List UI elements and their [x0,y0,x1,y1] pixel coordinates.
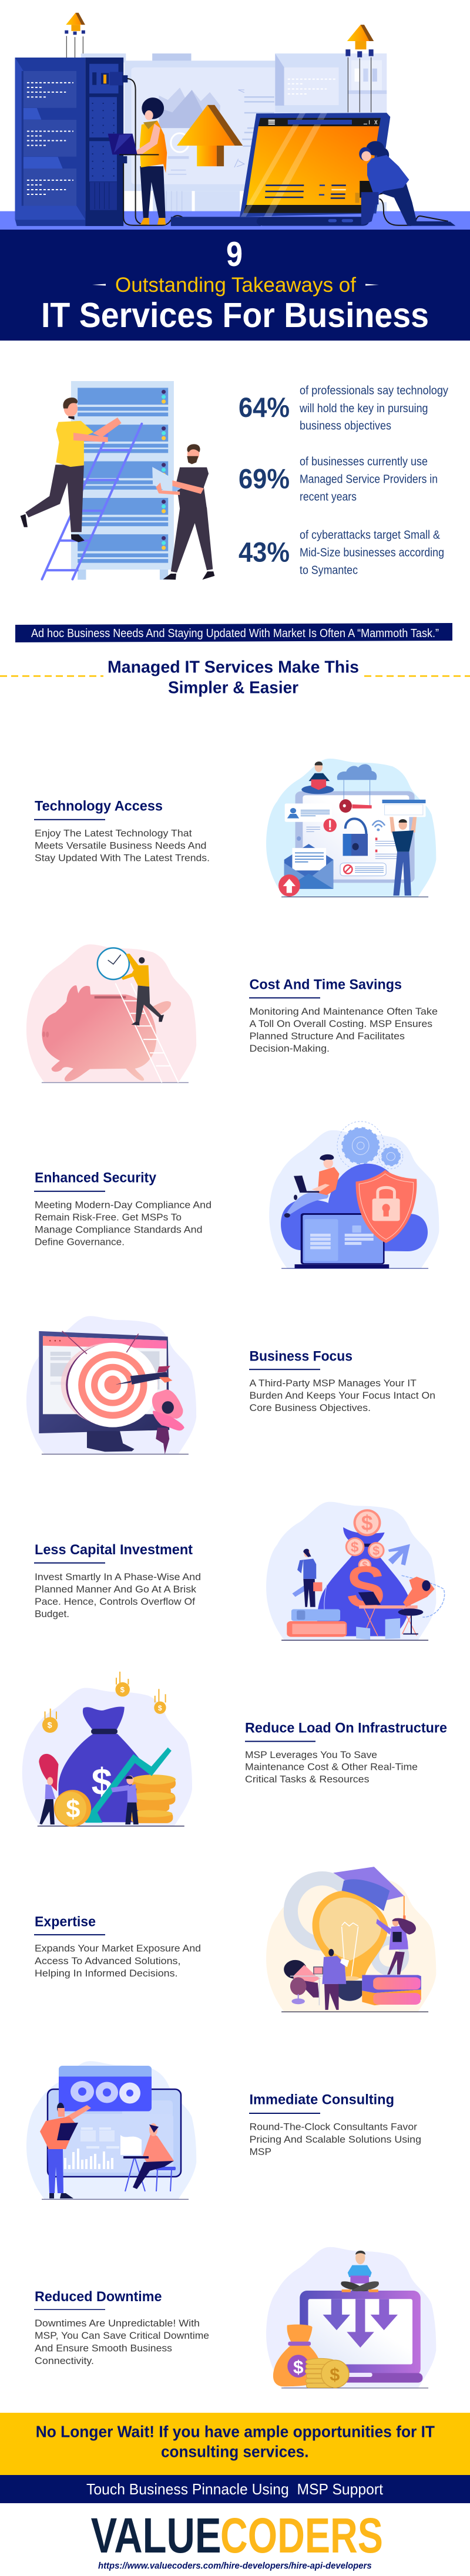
heading: Technology Access [35,799,163,814]
text block: MSP [249,2146,271,2157]
text block: Downtimes Are Unpredictable! With [35,2318,200,2329]
underline [34,2309,105,2310]
callout banner [15,623,452,642]
heading: Less Capital Investment [35,1542,193,1558]
illustration: security dashboard [266,759,436,897]
panel: Immediate Consulting [26,2061,421,2199]
statistic 69%: of businesses currently use [300,456,428,469]
heading: Reduced Downtime [35,2289,162,2305]
section heading: Simpler & Easier [168,679,298,698]
text block [35,1199,212,1248]
underline [34,1563,105,1564]
statistic 69% [239,456,438,504]
big up arrow [177,105,243,166]
text block: Invest Smartly In A Phase-Wise And [35,1571,201,1582]
text block: MSP Leverages You To Save [245,1749,377,1760]
underline [34,1934,105,1935]
text block: Enjoy The Latest Technology That [35,828,192,839]
text block: Expands Your Market Exposure And [35,1943,201,1954]
text block: Monitoring And Maintenance Often Take [249,1006,438,1017]
right dash [365,284,379,285]
statistic 64% [239,384,448,432]
text block: Pricing And Scalable Solutions Using [249,2134,421,2145]
illustration: money bag with chart arrow: $ [158,1704,162,1712]
text block: Remain Risk-Free. Get MSPs To [35,1212,182,1223]
heading: Business Focus [249,1349,352,1365]
title banner [0,230,470,341]
illustration: money bag and coins: $ [372,1544,380,1558]
statistic 43%: of cyberattacks target Small & [300,528,441,541]
text block: Helping In Informed Decisions. [35,1968,177,1979]
text block: Connectivity. [35,2355,94,2366]
text block: Round-The-Clock Consultants Favor [249,2121,417,2133]
heading: Cost And Time Savings [249,976,402,992]
ladder [42,424,142,579]
underline [34,819,105,820]
underline [249,1369,320,1370]
statistic 64%: business objectives [300,419,391,432]
cables [123,79,448,225]
panel: Business Focus [26,1316,435,1454]
section heading [0,658,470,698]
main title: IT Services For Business [41,296,429,335]
text block: Access To Advanced Solutions, [35,1955,181,1966]
text block: Meets Versatile Business Needs And [35,840,206,851]
text block: Burden And Keeps Your Focus Intact On [249,1390,435,1401]
man with tablet [152,444,214,580]
footer url: https://www.valuecoders.com/hire-developers/hire-api-developers [98,2561,372,2571]
text block: Critical Tasks & Resources [245,1774,369,1785]
illustration: money bag with chart arrow [22,1672,192,1827]
logo: ValueCoders [91,2508,383,2563]
server rack [15,58,127,226]
floor band [0,211,470,230]
callout banner: Ad hoc Business Needs And Staying Updated With Market Is Often A “Mammoth Task.” [31,627,439,640]
kneeling person [355,141,456,226]
text block [35,828,210,864]
text block [35,2318,209,2366]
small up arrow left [66,13,85,58]
panel: Reduce Load On Infrastructure [22,1672,447,1827]
heading: Enhanced Security [35,1170,157,1186]
subtitle: Outstanding Takeaways of [115,274,356,297]
text block: Budget. [35,1608,69,1619]
illustration: money bag with chart arrow: $ [48,1721,52,1730]
statistic 69%: 69% [239,463,290,494]
panel: Cost And Time Savings [26,944,438,1083]
underline [245,1741,315,1742]
underline [34,1191,105,1192]
statistic 64%: will hold the key in pursuing [299,402,428,415]
panel: Reduced Downtime [34,2247,436,2388]
presenter [40,2103,91,2198]
call to action band: No Longer Wait! If you have ample opportunities for IT [36,2423,435,2440]
illustration: money bag with chart arrow: $ [120,1685,125,1694]
statistic 64%: 64% [239,392,290,423]
man on ladder [21,398,122,542]
text block: Maintenance Cost & Other Real-Time [245,1762,418,1772]
heading: Reduce Load On Infrastructure [245,1720,447,1736]
seated analyst [120,2123,176,2191]
text block: Manage Compliance Standards And [35,1224,202,1235]
heading: Immediate Consulting [249,2092,394,2108]
panel: Less Capital Investment [34,1502,445,1640]
text block [249,1378,435,1413]
illustration: piggy bank [26,944,196,1083]
illustration: laptop with down arrows: $ [293,2356,304,2378]
section heading: Managed IT Services Make This [108,658,359,676]
statistic 43% [239,528,444,577]
statistic 43%: 43% [239,537,290,567]
text block: MSP, You Can Save Critical Downtime [35,2330,209,2341]
text block [35,1943,201,1979]
illustration: money bag with chart arrow: $ [66,1796,80,1824]
hero illustration [0,13,470,230]
text block: And Ensure Smooth Business [35,2343,172,2354]
text block: Define Governance. [35,1237,125,1248]
tagline band [0,2475,470,2503]
illustration: money bag with chart arrow: $ [92,1760,112,1803]
stats illustration [21,381,214,580]
illustration: money bag and coins: $ [361,1511,373,1535]
small up arrow right [347,25,374,112]
text block: Pace. Hence, Controls Overflow Of [35,1596,195,1607]
illustration: money bag and coins: $ [351,1540,359,1555]
illustration: light bulb and graduation cap [266,1867,436,2012]
text block: Stay Updated With The Latest Trends. [35,853,210,864]
illustration: analytics dashboard [26,2061,196,2199]
underline [249,997,320,998]
statistic 69%: Managed Service Providers in [300,473,438,486]
statistic 64%: of professionals say technology [300,384,448,397]
illustration: money bag and coins: S [346,1555,385,1620]
illustration: target on monitor [26,1316,196,1454]
laptop [171,113,390,226]
logo: ValueCoders: VALUE [91,2508,221,2563]
text block [245,1749,418,1785]
statistic 69%: recent years [300,491,357,504]
panel: Enhanced Security [34,1122,439,1268]
statistic 43%: Mid-Size businesses according [300,546,444,559]
text block: Planned Manner And Go At A Brisk [35,1584,197,1595]
illustration: cloud security [269,1122,439,1268]
text block: A Toll On Overall Costing. MSP Ensures [249,1018,432,1029]
illustration: money bag and coins: $ [362,1560,367,1571]
call to action band [0,2413,470,2475]
text block [249,1006,438,1054]
illustration: laptop with down arrows [266,2247,436,2388]
panel: Expertise [34,1867,436,2012]
text block [35,1571,201,1619]
text block: Meeting Modern-Day Compliance And [35,1199,212,1211]
underline [249,2113,320,2114]
left dash [92,284,106,285]
heading: Expertise [35,1914,96,1930]
server tower [71,381,174,580]
text block [249,2121,421,2157]
text block: A Third-Party MSP Manages Your IT [249,1378,417,1389]
text block: Core Business Objectives. [249,1402,371,1413]
background monitors [81,53,387,225]
statistic 43%: to Symantec [300,564,358,577]
call to action band: consulting services. [161,2443,309,2461]
panel: Technology Access [34,759,436,897]
tagline band: Touch Business Pinnacle Using MSP Support [86,2480,384,2498]
person with laptop [108,97,167,225]
title number: 9 [226,235,243,274]
illustration: laptop with down arrows: $ [330,2365,340,2385]
text block: Decision-Making. [249,1043,330,1054]
logo: ValueCoders: CODERS [220,2508,383,2563]
illustration: money bag and coins [266,1502,445,1640]
text block: Planned Structure And Facilitates [249,1031,405,1042]
